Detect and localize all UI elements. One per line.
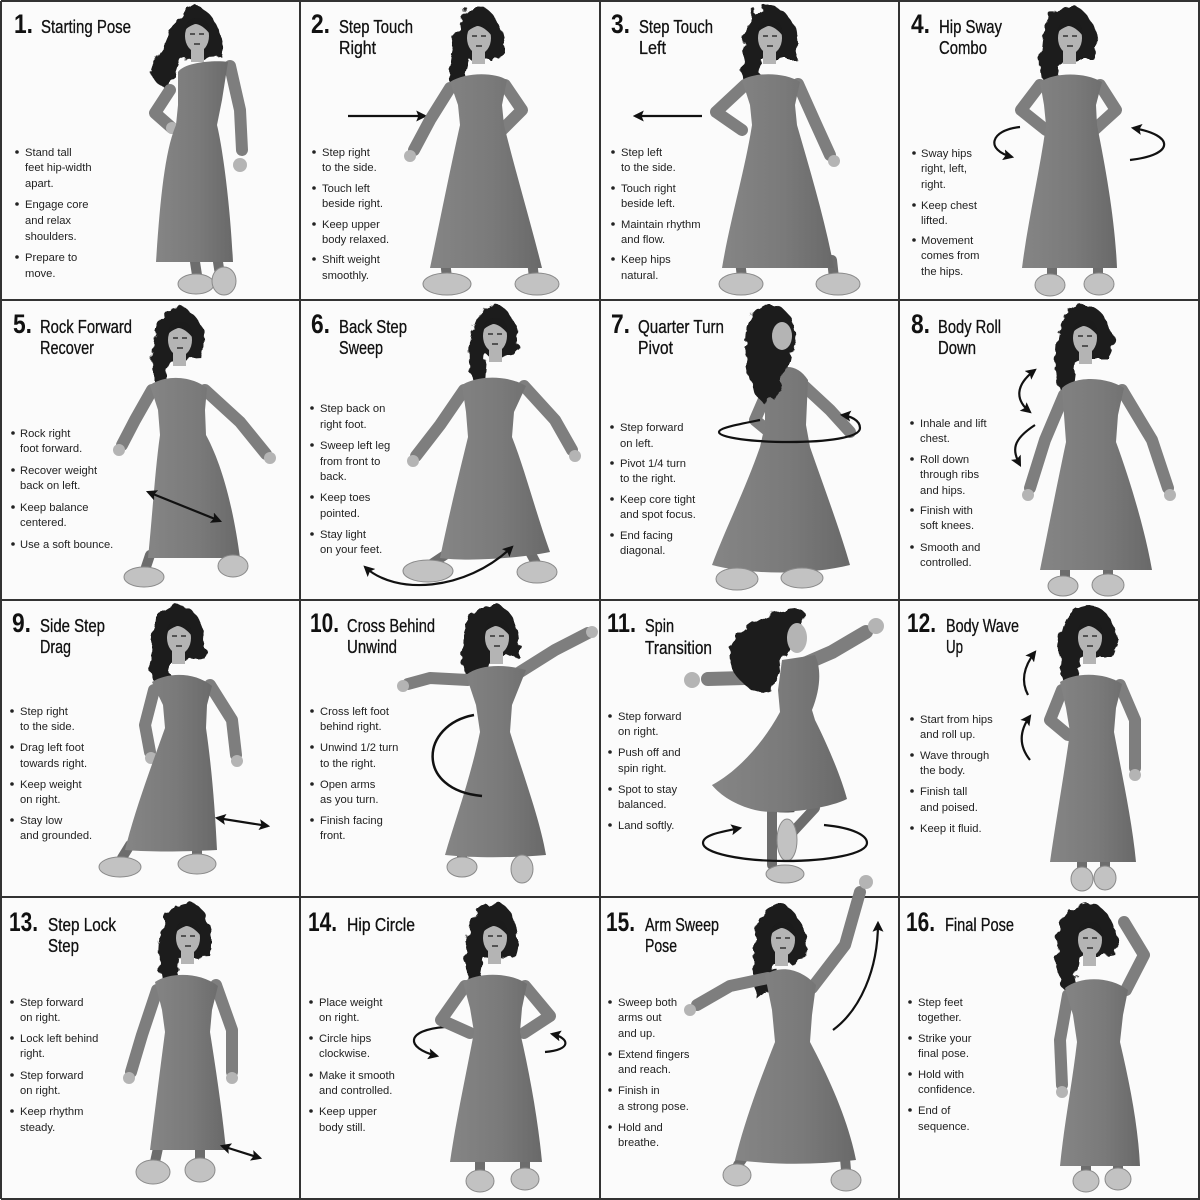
heading: step 11: Transition bbox=[645, 638, 712, 658]
heading: step 2 bbox=[311, 9, 413, 58]
instructions: step 5: centered. bbox=[20, 517, 67, 529]
heading: step 10: Unwind bbox=[347, 637, 397, 657]
instructions: step 4: lifted. bbox=[921, 215, 948, 227]
heading: step 3 bbox=[611, 9, 713, 58]
arrows: hip circle bbox=[414, 1027, 565, 1056]
instructions: step 2: beside right. bbox=[322, 198, 383, 210]
panel: step 5 rock forward recover bbox=[11, 308, 276, 587]
instructions: step 6: pointed. bbox=[320, 508, 360, 520]
instructions: step 3: beside left. bbox=[621, 198, 675, 210]
instructions: step 8: through ribs bbox=[920, 469, 979, 481]
heading: step 3: Step Touch bbox=[639, 17, 713, 37]
instructions: step 9: Keep weight bbox=[20, 779, 82, 791]
instructions: step 11: on right. bbox=[618, 726, 658, 738]
instructions: step 9: to the side. bbox=[20, 721, 75, 733]
heading: step 3: 3. bbox=[611, 9, 630, 39]
heading: step 7: Pivot bbox=[638, 338, 673, 358]
heading: step 12 bbox=[907, 608, 1019, 657]
instructions: step 15: Extend fingers bbox=[618, 1049, 690, 1061]
heading: step 11: Spin bbox=[645, 616, 674, 636]
instructions: step 7: Pivot 1/4 turn bbox=[620, 458, 686, 470]
instructions: step 3 bbox=[611, 147, 701, 282]
instructions: step 15: Finish in bbox=[618, 1085, 660, 1097]
figure: arm sweep pose bbox=[684, 875, 873, 1191]
heading: step 16 bbox=[906, 907, 1014, 937]
instructions: step 7: Keep core tight bbox=[620, 494, 696, 506]
figure: back step sweep bbox=[403, 305, 581, 583]
heading: step 12: 12. bbox=[907, 608, 936, 638]
instructions: step 15: and up. bbox=[618, 1028, 655, 1040]
instructions: step 11: balanced. bbox=[618, 799, 667, 811]
panel: step 10 cross behind unwind bbox=[310, 605, 598, 883]
heading: step 15: Pose bbox=[645, 936, 677, 956]
instructions: step 14: clockwise. bbox=[319, 1048, 370, 1060]
heading: step 11: 11. bbox=[607, 608, 636, 638]
heading: step 15: Arm Sweep bbox=[645, 915, 719, 935]
instructions: step 5: Rock right bbox=[20, 428, 71, 440]
instructions: step 16: Strike your bbox=[918, 1033, 972, 1045]
instructions: step 7: on left. bbox=[620, 438, 654, 450]
instructions: step 2: Shift weight bbox=[322, 254, 381, 266]
heading: step 6 bbox=[311, 309, 407, 358]
instructions: step 14 bbox=[309, 997, 395, 1134]
instructions: step 16 bbox=[908, 997, 975, 1133]
instructions: step 3: and flow. bbox=[621, 234, 665, 246]
heading: step 6: Sweep bbox=[339, 338, 383, 358]
heading: step 8: 8. bbox=[911, 309, 930, 339]
instructions: step 10: to the right. bbox=[320, 758, 376, 770]
instructions: step 12: Keep it fluid. bbox=[920, 823, 982, 835]
panel: step 15 arm sweep pose bbox=[606, 875, 878, 1191]
instructions: step 10 bbox=[310, 706, 398, 842]
figure: spin transition bbox=[684, 608, 884, 883]
arrow: left bbox=[635, 115, 702, 117]
instructions: step 5: Recover weight bbox=[20, 465, 98, 477]
instructions: step 8 bbox=[910, 418, 987, 569]
instructions: step 10: Finish facing bbox=[320, 815, 383, 827]
arrows: body roll bbox=[1015, 370, 1035, 465]
instructions: step 4: Movement bbox=[921, 235, 974, 247]
instructions: step 2: to the side. bbox=[322, 162, 377, 174]
instructions: step 10: front. bbox=[320, 830, 346, 842]
instructions: step 2: Step right bbox=[322, 147, 371, 159]
instructions: step 1: shoulders. bbox=[25, 231, 77, 243]
figure: body wave up bbox=[1050, 605, 1141, 891]
instructions: step 10: Unwind 1/2 turn bbox=[320, 742, 398, 754]
instructions: step 14: Place weight bbox=[319, 997, 383, 1009]
heading: step 12: Up bbox=[946, 637, 963, 657]
heading: step 1: Starting Pose bbox=[41, 17, 131, 37]
instructions: step 9: on right. bbox=[20, 794, 60, 806]
heading: step 13: 13. bbox=[9, 907, 38, 937]
heading: step 11 bbox=[607, 608, 712, 658]
heading: step 5: Rock Forward bbox=[40, 317, 132, 337]
heading: step 9: 9. bbox=[12, 608, 31, 638]
instructions: step 2: Keep upper bbox=[322, 219, 380, 231]
figure: quarter turn pivot bbox=[712, 305, 850, 590]
instructions: step 8: Roll down bbox=[920, 454, 969, 466]
arrow: arm sweep bbox=[833, 923, 878, 1030]
instructions: step 12: Wave through bbox=[920, 750, 989, 762]
instructions: step 4: right, left, bbox=[921, 163, 967, 175]
panel: step 11 spin transition bbox=[607, 608, 884, 883]
instructions: step 1: and relax bbox=[25, 215, 71, 227]
heading: step 13 bbox=[9, 907, 117, 956]
instructions: step 3: to the side. bbox=[621, 162, 676, 174]
instructions: step 4: Sway hips bbox=[921, 148, 972, 160]
instructions: step 12: Start from hips bbox=[920, 714, 993, 726]
instructions: step 13: Step forward bbox=[20, 997, 83, 1009]
heading: step 10: Cross Behind bbox=[347, 616, 435, 636]
instructions: step 15: arms out bbox=[618, 1012, 662, 1024]
heading: step 4: 4. bbox=[911, 9, 930, 39]
heading: step 15: 15. bbox=[606, 907, 635, 937]
instructions: step 12 bbox=[910, 714, 993, 835]
instructions: step 10: behind right. bbox=[320, 721, 382, 733]
panel: step 12 body wave up bbox=[907, 605, 1141, 891]
heading: step 7 bbox=[611, 309, 724, 358]
heading: step 8: Body Roll bbox=[938, 317, 1001, 337]
instructions: step 4: right. bbox=[921, 179, 946, 191]
instructions: step 13: on right. bbox=[20, 1012, 60, 1024]
heading: step 14 bbox=[308, 907, 415, 937]
instructions: step 6: Step back on bbox=[320, 403, 385, 415]
instructions: step 6: Keep toes bbox=[320, 492, 371, 504]
instructions: step 15: Hold and bbox=[618, 1122, 663, 1134]
arrow: spin ring bbox=[703, 825, 867, 861]
panel: step 3 step touch left bbox=[611, 6, 860, 295]
instructions: step 8: Inhale and lift bbox=[920, 418, 987, 430]
instructions: step 11: Step forward bbox=[618, 711, 681, 723]
instructions: step 4 bbox=[912, 148, 979, 278]
panel: step 6 back step sweep bbox=[310, 305, 581, 585]
arrow: unwind arc bbox=[433, 715, 482, 796]
instructions: step 14: Keep upper bbox=[319, 1106, 377, 1118]
instructions: step 16: End of bbox=[918, 1105, 951, 1117]
instructions: step 13 bbox=[10, 997, 98, 1134]
heading: step 8: Down bbox=[938, 338, 976, 358]
instructions: step 9: Step right bbox=[20, 706, 69, 718]
instructions: step 15: a strong pose. bbox=[618, 1101, 689, 1113]
instructions: step 7: End facing bbox=[620, 530, 673, 542]
panel: step 4 hip sway combo bbox=[911, 6, 1164, 296]
panel: step 14 hip circle bbox=[308, 902, 565, 1192]
instructions: step 7: and spot focus. bbox=[620, 509, 696, 521]
panel: step 9 side step drag bbox=[10, 605, 268, 877]
figure: rock forward bbox=[113, 308, 276, 587]
instructions: step 2: Touch left bbox=[322, 183, 371, 195]
instructions: step 6: Sweep left leg bbox=[320, 440, 390, 452]
instructions: step 1: move. bbox=[25, 268, 55, 280]
heading: step 1: 1. bbox=[14, 9, 33, 39]
instructions: step 5: back on left. bbox=[20, 480, 80, 492]
instructions: step 14: on right. bbox=[319, 1012, 359, 1024]
arrow: right bbox=[348, 115, 425, 117]
figure: starting pose bbox=[150, 6, 247, 295]
heading: step 8 bbox=[911, 309, 1001, 358]
figure: step lock step bbox=[123, 902, 238, 1184]
heading: step 7: 7. bbox=[611, 309, 630, 339]
instructions: step 6: from front to bbox=[320, 456, 380, 468]
instructions: step 8: Finish with bbox=[920, 505, 973, 517]
instructions: step 7: diagonal. bbox=[620, 545, 665, 557]
arrow: sweep bbox=[365, 547, 512, 585]
instructions: step 9: and grounded. bbox=[20, 830, 92, 842]
instructions: step 5: Use a soft bounce. bbox=[20, 539, 113, 551]
instructions: step 8: controlled. bbox=[920, 557, 972, 569]
instructions: step 13: on right. bbox=[20, 1085, 60, 1097]
instructions: step 10: as you turn. bbox=[320, 794, 378, 806]
instructions: step 16: sequence. bbox=[918, 1121, 970, 1133]
instructions: step 9: Drag left foot bbox=[20, 742, 85, 754]
instructions: step 6: Stay light bbox=[320, 529, 367, 541]
instructions: step 1: apart. bbox=[25, 178, 54, 190]
heading: step 4: Combo bbox=[939, 38, 987, 58]
instructions: step 8: chest. bbox=[920, 433, 950, 445]
heading: step 9: Side Step bbox=[40, 616, 105, 636]
instructions: step 10: Open arms bbox=[320, 779, 376, 791]
figure: step touch right bbox=[404, 6, 559, 295]
heading: step 2: 2. bbox=[311, 9, 330, 39]
instructions: step 2: body relaxed. bbox=[322, 234, 389, 246]
instructions: step 9: towards right. bbox=[20, 758, 87, 770]
heading: step 2: Step Touch bbox=[339, 17, 413, 37]
instructions: step 9: Stay low bbox=[20, 815, 63, 827]
instructions: step 11: Push off and bbox=[618, 747, 681, 759]
instructions: step 13: steady. bbox=[20, 1122, 55, 1134]
instructions: step 5 bbox=[11, 428, 113, 551]
instructions: step 5: Keep balance bbox=[20, 502, 88, 514]
figure: side step drag bbox=[99, 605, 243, 877]
instructions: step 6: right foot. bbox=[320, 419, 367, 431]
figure: hip circle bbox=[441, 902, 550, 1192]
heading: step 13: Step bbox=[48, 936, 79, 956]
instructions: step 14: Circle hips bbox=[319, 1033, 372, 1045]
instructions: step 1: Engage core bbox=[25, 199, 88, 211]
instructions: step 1: Prepare to bbox=[25, 252, 77, 264]
instructions: step 12: Finish tall bbox=[920, 786, 967, 798]
panel: step 2 step touch right bbox=[311, 6, 559, 295]
arrow: rock forward and back bbox=[148, 492, 220, 521]
instructions: step 3: Keep hips bbox=[621, 254, 671, 266]
heading: step 12: Body Wave bbox=[946, 616, 1019, 636]
heading: step 5: Recover bbox=[40, 338, 94, 358]
instructions: step 15: and reach. bbox=[618, 1064, 671, 1076]
instructions: step 7: Step forward bbox=[620, 422, 683, 434]
arrows: hip sway bbox=[994, 127, 1164, 160]
instructions: step 16: Hold with bbox=[918, 1069, 964, 1081]
heading: step 6: 6. bbox=[311, 309, 330, 339]
heading: step 5: 5. bbox=[13, 309, 32, 339]
instructions: step 14: Make it smooth bbox=[319, 1070, 395, 1082]
instructions: step 9 bbox=[10, 706, 92, 842]
heading: step 4: Hip Sway bbox=[939, 17, 1002, 37]
figure: cross behind unwind bbox=[397, 605, 598, 883]
instructions: step 14: and controlled. bbox=[319, 1085, 392, 1097]
heading: step 1 bbox=[14, 9, 131, 39]
instructions: step 1: Stand tall bbox=[25, 147, 72, 159]
instructions: step 4: the hips. bbox=[921, 266, 963, 278]
instructions: step 14: body still. bbox=[319, 1122, 366, 1134]
heading: step 9: Drag bbox=[40, 637, 71, 657]
arrow: lock step bbox=[222, 1146, 260, 1158]
heading: step 7: Quarter Turn bbox=[638, 317, 724, 337]
heading: step 14: 14. bbox=[308, 907, 337, 937]
arrow: quarter turn ring bbox=[719, 415, 860, 442]
instructions: step 11: Spot to stay bbox=[618, 784, 677, 796]
instructions: step 16: together. bbox=[918, 1012, 962, 1024]
instructions: step 13: right. bbox=[20, 1048, 45, 1060]
heading: step 14: Hip Circle bbox=[347, 915, 415, 935]
heading: step 5 bbox=[13, 309, 132, 358]
instructions: step 2 bbox=[312, 147, 389, 282]
instructions: step 7 bbox=[610, 422, 696, 557]
panel: step 16 final pose bbox=[906, 903, 1144, 1192]
instructions: step 3: Touch right bbox=[621, 183, 677, 195]
heading: step 10: 10. bbox=[310, 608, 339, 638]
instructions: step 11: Land softly. bbox=[618, 820, 674, 832]
instructions: step 12: and poised. bbox=[920, 802, 978, 814]
heading: step 3: Left bbox=[639, 38, 666, 58]
instructions: step 12: and roll up. bbox=[920, 729, 975, 741]
instructions: step 10: Cross left foot bbox=[320, 706, 390, 718]
instructions: step 1 bbox=[15, 147, 92, 280]
panel: step 13 step lock step bbox=[9, 902, 260, 1184]
instructions: step 4: Keep chest bbox=[921, 200, 978, 212]
arrow: drag bbox=[217, 818, 268, 826]
instructions: step 7: to the right. bbox=[620, 473, 676, 485]
figure: body roll bbox=[1022, 305, 1176, 596]
instructions: step 6 bbox=[310, 403, 390, 556]
heading: step 6: Back Step bbox=[339, 317, 407, 337]
arrows: body wave bbox=[1022, 652, 1035, 760]
instructions: step 6: on your feet. bbox=[320, 544, 382, 556]
heading: step 16: 16. bbox=[906, 907, 935, 937]
instructions: step 16: Step feet bbox=[918, 997, 964, 1009]
instructions: step 11: spin right. bbox=[618, 763, 667, 775]
instructions: step 8: soft knees. bbox=[920, 520, 974, 532]
instructions: step 1: feet hip-width bbox=[25, 162, 92, 174]
panel: step 7 quarter turn pivot bbox=[610, 305, 860, 590]
instructions: step 5: foot forward. bbox=[20, 443, 82, 455]
instructions: step 4: comes from bbox=[921, 250, 979, 262]
panel: step 1 starting pose bbox=[14, 6, 247, 295]
instructions: step 3: Maintain rhythm bbox=[621, 219, 701, 231]
panel: step 8 body roll down bbox=[910, 305, 1176, 596]
instructions: step 13: Step forward bbox=[20, 1070, 83, 1082]
instructions: step 13: Lock left behind bbox=[20, 1033, 98, 1045]
heading: step 10 bbox=[310, 608, 435, 657]
instructions: step 8: and hips. bbox=[920, 485, 965, 497]
heading: step 9 bbox=[12, 608, 105, 657]
instructions: step 3: Step left bbox=[621, 147, 663, 159]
instructions: step 3: natural. bbox=[621, 270, 658, 282]
figure: step touch left bbox=[716, 6, 860, 295]
instructions: step 15: Sweep both bbox=[618, 997, 677, 1009]
instructions: step 13: Keep rhythm bbox=[20, 1106, 83, 1118]
instructions: step 2: smoothly. bbox=[322, 270, 369, 282]
heading: step 2: Right bbox=[339, 38, 376, 58]
instructions: step 8: Smooth and bbox=[920, 542, 980, 554]
heading: step 15 bbox=[606, 907, 719, 956]
instructions: step 12: the body. bbox=[920, 765, 965, 777]
heading: step 16: Final Pose bbox=[945, 915, 1014, 935]
instructions: step 15: breathe. bbox=[618, 1137, 659, 1149]
heading: step 4 bbox=[911, 9, 1002, 58]
instructions: step 11 bbox=[608, 711, 681, 832]
instructions: step 16: confidence. bbox=[918, 1084, 975, 1096]
heading: step 13: Step Lock bbox=[48, 915, 117, 935]
instructions: step 15 bbox=[608, 997, 690, 1149]
figure: hip sway bbox=[1021, 6, 1117, 296]
figure: final pose bbox=[1055, 903, 1144, 1192]
instructions: step 16: final pose. bbox=[918, 1048, 969, 1060]
instructions: step 6: back. bbox=[320, 471, 347, 483]
